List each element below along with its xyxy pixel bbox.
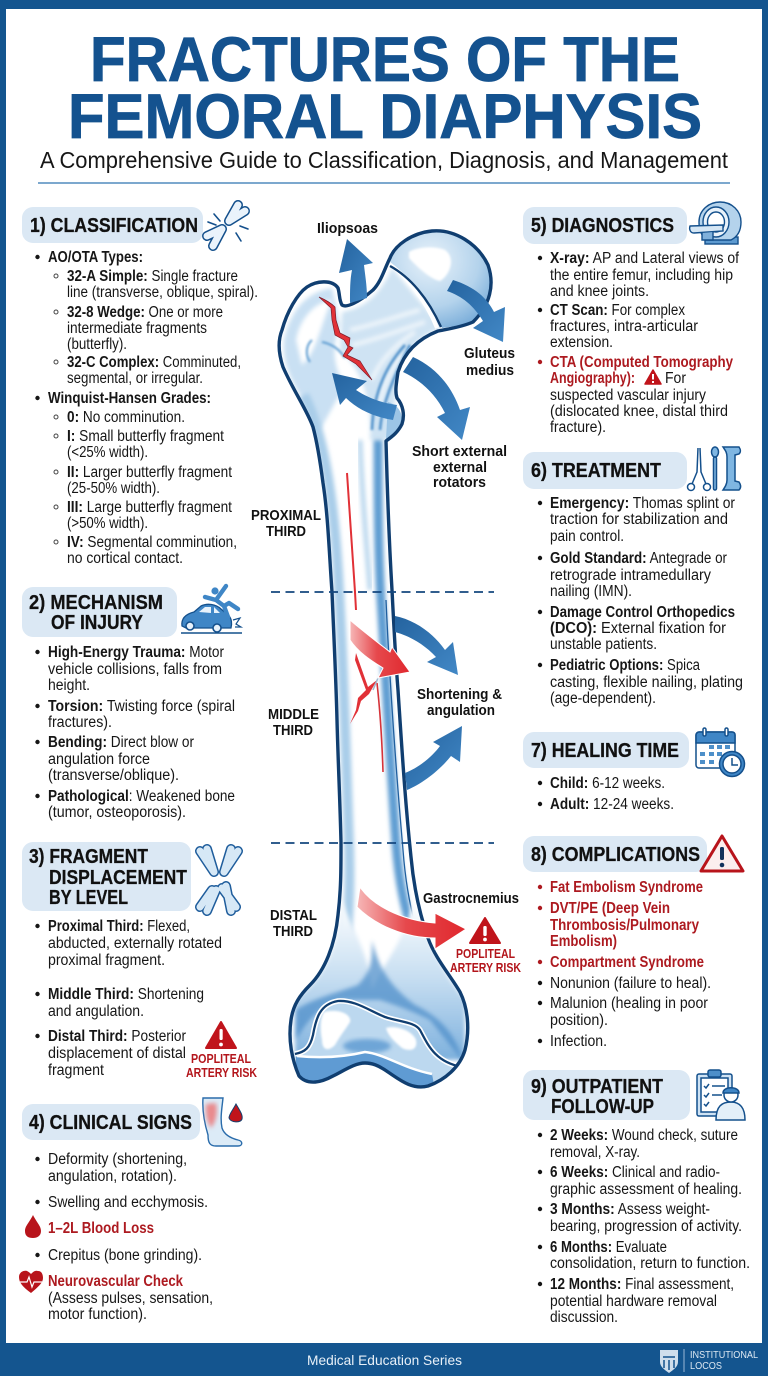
label: distal third: THIRD bbox=[273, 924, 313, 940]
treatment text: (age-dependent). bbox=[550, 690, 656, 707]
heading: clinical signs bbox=[22, 1104, 200, 1140]
title: FEMORAL DIAPHYSIS bbox=[68, 82, 702, 152]
panel: treatment bbox=[523, 447, 743, 707]
institutional logos text: INSTITUTIONAL bbox=[690, 1350, 758, 1361]
clinical signs text: Swelling and ecchymosis. bbox=[48, 1194, 208, 1211]
fragment displacement text: fragment bbox=[48, 1062, 105, 1079]
treatment text: casting, flexible nailing, plating bbox=[550, 674, 743, 691]
treatment text: Gold Standard: Antegrade or bbox=[550, 550, 727, 567]
treatment text: unstable patients. bbox=[550, 636, 657, 653]
heading: fragment displacement by level: DISPLACEMENT bbox=[49, 866, 187, 889]
diagnostics text bbox=[538, 250, 740, 436]
treatment text: Damage Control Orthopedics bbox=[550, 604, 735, 621]
heading: clinical signs: 4) CLINICAL SIGNS bbox=[29, 1111, 192, 1134]
follow-up text: removal, X-ray. bbox=[550, 1144, 640, 1161]
heading: mechanism of injury bbox=[22, 587, 177, 637]
heading: classification bbox=[22, 207, 203, 243]
label: middle third: THIRD bbox=[273, 723, 313, 739]
follow-up text: 6 Weeks: Clinical and radio- bbox=[550, 1164, 720, 1181]
icon: heart with pulse bbox=[19, 1271, 43, 1293]
icon: MRI scanner bbox=[690, 202, 741, 244]
classification text: (25-50% width). bbox=[67, 480, 160, 497]
footer bbox=[307, 1349, 758, 1373]
heading: outpatient follow-up: 9) OUTPATIENT bbox=[531, 1075, 663, 1098]
callout: popliteal artery risk at femur: POPLITEAL bbox=[456, 946, 515, 961]
complications text bbox=[538, 879, 711, 1050]
fragment displacement text: displacement of distal bbox=[48, 1045, 186, 1062]
callout: popliteal artery risk: POPLITEAL bbox=[191, 1051, 251, 1066]
diagnostics text: suspected vascular injury bbox=[550, 387, 706, 404]
clinical signs text: angulation, rotation). bbox=[48, 1168, 177, 1185]
heading: healing time: 7) HEALING TIME bbox=[531, 739, 679, 762]
fragment displacement text: Proximal Third: Flexed, bbox=[48, 918, 190, 935]
diagnostics text: For bbox=[665, 370, 686, 387]
follow-up text bbox=[538, 1127, 750, 1326]
diagnostics text: fractures, intra-articular bbox=[550, 318, 698, 335]
fragment displacement text: Middle Third: Shortening bbox=[48, 986, 204, 1003]
condyle surface bbox=[290, 1001, 465, 1095]
classification text: 32-A Simple: Single fracture bbox=[67, 268, 238, 285]
label: short external rotators bbox=[412, 444, 507, 491]
healing time text bbox=[538, 775, 674, 813]
heading: fragment displacement by level: 3) FRAGMENT bbox=[29, 845, 148, 868]
heading: complications: 8) COMPLICATIONS bbox=[531, 843, 700, 866]
arrow: red middle third bbox=[350, 620, 410, 678]
complications text: Malunion (healing in poor bbox=[550, 995, 708, 1012]
icon: inline warning bbox=[645, 370, 661, 384]
heading: fragment displacement by level: BY LEVEL bbox=[49, 886, 128, 909]
fragment displacement text bbox=[35, 918, 222, 1079]
title bbox=[68, 25, 702, 152]
panel: outpatient follow-up bbox=[523, 1070, 750, 1326]
complications text: Infection. bbox=[550, 1033, 607, 1050]
trochanter shading bbox=[284, 288, 345, 430]
follow-up text: 2 Weeks: Wound check, suture bbox=[550, 1127, 738, 1144]
classification text: IV: Segmental comminution, bbox=[67, 534, 237, 551]
icon: clipboard and doctor bbox=[697, 1070, 745, 1120]
diagnostics text: the entire femur, including hip bbox=[550, 267, 733, 284]
classification text: III: Large butterfly fragment bbox=[67, 499, 233, 516]
panel: diagnostics bbox=[523, 202, 741, 436]
callout: popliteal artery risk: ARTERY RISK bbox=[186, 1065, 257, 1080]
shaft right strips bbox=[378, 440, 432, 975]
complications text: Compartment Syndrome bbox=[550, 954, 704, 971]
label: middle third: MIDDLE bbox=[268, 707, 319, 723]
arrow: proximal fragment rotation bbox=[332, 373, 397, 420]
institutional logos text: LOCOS bbox=[690, 1361, 722, 1372]
icon: blood drop bbox=[25, 1215, 41, 1238]
complications text: Thrombosis/Pulmonary bbox=[550, 917, 699, 934]
arrow: gluteus medius bbox=[447, 280, 505, 342]
panel: healing time bbox=[523, 728, 744, 813]
mechanism text: fractures). bbox=[48, 714, 112, 731]
callout: popliteal artery risk bbox=[186, 1022, 257, 1080]
follow-up text: graphic assessment of healing. bbox=[550, 1181, 742, 1198]
callout: popliteal artery risk at femur: ARTERY RISK bbox=[450, 960, 521, 975]
heading: healing time bbox=[523, 732, 689, 768]
heading: diagnostics: 5) DIAGNOSTICS bbox=[531, 214, 674, 237]
fragment displacement text: abducted, externally rotated bbox=[48, 935, 222, 952]
clinical signs text: Deformity (shortening, bbox=[48, 1151, 187, 1168]
treatment text: Emergency: Thomas splint or bbox=[550, 495, 735, 512]
panel: complications bbox=[523, 836, 743, 1050]
icon: broken bone bbox=[207, 205, 248, 246]
mechanism text: Bending: Direct blow or bbox=[48, 734, 194, 751]
follow-up text: discussion. bbox=[550, 1309, 618, 1326]
fragment displacement text: and angulation. bbox=[48, 1003, 144, 1020]
diagnostics text: extension. bbox=[550, 334, 613, 351]
panel: clinical signs bbox=[19, 1098, 242, 1323]
treatment text: retrograde intramedullary bbox=[550, 567, 711, 584]
lesser trochanter bbox=[386, 402, 402, 439]
mechanism text: (tumor, osteoporosis). bbox=[48, 804, 186, 821]
callout: popliteal artery risk at femur bbox=[450, 918, 521, 975]
fragment displacement text: proximal fragment. bbox=[48, 952, 165, 969]
follow-up text: 12 Months: Final assessment, bbox=[550, 1276, 734, 1293]
heading: fragment displacement by level bbox=[22, 842, 191, 911]
heading: mechanism of injury: OF INJURY bbox=[51, 611, 143, 634]
distal metaphysis bbox=[295, 900, 465, 1060]
mechanism text: (transverse/oblique). bbox=[48, 767, 179, 784]
healing time text: Child: 6-12 weeks. bbox=[550, 775, 665, 792]
arrow: iliopsoas bbox=[339, 239, 373, 303]
treatment text: pain control. bbox=[550, 528, 624, 545]
follow-up text: bearing, progression of activity. bbox=[550, 1218, 742, 1235]
label: iliopsoas: Iliopsoas bbox=[317, 221, 378, 237]
mechanism text bbox=[35, 644, 235, 821]
arrow: short external rotators bbox=[403, 357, 470, 440]
label: middle third bbox=[268, 707, 319, 739]
neck shading bbox=[340, 268, 442, 440]
classification text bbox=[35, 249, 258, 567]
follow-up text: consolidation, return to function. bbox=[550, 1255, 750, 1272]
complications text: Nonunion (failure to heal). bbox=[550, 975, 711, 992]
label: gluteus medius: medius bbox=[466, 363, 514, 379]
heading: diagnostics bbox=[523, 207, 687, 244]
classification text: (>50% width). bbox=[67, 515, 148, 532]
classification text: 32-C Complex: Comminuted, bbox=[67, 354, 241, 371]
classification text: Winquist-Hansen Grades: bbox=[48, 390, 211, 407]
arrow: angulation lower bbox=[405, 726, 462, 790]
title: FRACTURES OF THE bbox=[90, 25, 680, 95]
heading: treatment bbox=[523, 452, 687, 489]
panel: classification bbox=[22, 205, 258, 567]
mechanism text: Pathological: Weakened bone bbox=[48, 788, 235, 805]
classification text: I: Small butterfly fragment bbox=[67, 428, 225, 445]
heading: mechanism of injury: 2) MECHANISM bbox=[29, 591, 163, 614]
clinical signs text: motor function). bbox=[48, 1306, 147, 1323]
icon: surgical instruments bbox=[688, 447, 740, 490]
follow-up text: 6 Months: Evaluate bbox=[550, 1239, 667, 1256]
arrow: red distal third bbox=[357, 887, 466, 949]
heading: outpatient follow-up bbox=[523, 1070, 690, 1120]
mechanism text: vehicle collisions, falls from bbox=[48, 661, 222, 678]
treatment text: Pediatric Options: Spica bbox=[550, 657, 700, 674]
clinical signs text: Neurovascular Check bbox=[48, 1273, 183, 1290]
classification text: no cortical contact. bbox=[67, 550, 183, 567]
label: proximal third: PROXIMAL bbox=[251, 508, 321, 524]
label: gastrocnemius: Gastrocnemius bbox=[423, 891, 519, 907]
diagnostics text: Angiography): bbox=[550, 370, 635, 387]
label: short external rotators: rotators bbox=[433, 475, 486, 491]
complications text: position). bbox=[550, 1012, 608, 1029]
follow-up text: potential hardware removal bbox=[550, 1293, 717, 1310]
classification text: AO/OTA Types: bbox=[48, 249, 143, 266]
healing time text: Adult: 12-24 weeks. bbox=[550, 796, 674, 813]
panel: fragment displacement bbox=[22, 842, 257, 1080]
classification text: 0: No comminution. bbox=[67, 409, 185, 426]
subtitle: A Comprehensive Guide to Classification, Diagnosis, and Management bbox=[40, 147, 728, 173]
icon: calendar and clock bbox=[696, 728, 744, 776]
icon: car collision and falling person bbox=[181, 586, 242, 633]
bone illustration bbox=[262, 222, 512, 1098]
heading: complications bbox=[523, 836, 707, 872]
treatment text: (DCO): External fixation for bbox=[550, 620, 726, 637]
treatment text: nailing (IMN). bbox=[550, 583, 632, 600]
panel: mechanism of injury bbox=[22, 586, 242, 821]
icon: crossed bones bbox=[200, 849, 238, 911]
treatment text: traction for stabilization and bbox=[550, 511, 728, 528]
diagnostics text: fracture). bbox=[550, 419, 606, 436]
classification text: 32-8 Wedge: One or more bbox=[67, 304, 223, 321]
label: gluteus medius bbox=[464, 346, 515, 379]
diagnostics text: (dislocated knee, distal third bbox=[550, 403, 728, 420]
complications text: DVT/PE (Deep Vein bbox=[550, 900, 670, 917]
mechanism text: angulation force bbox=[48, 751, 150, 768]
fragment displacement text: Distal Third: Posterior bbox=[48, 1028, 186, 1045]
classification text: (<25% width). bbox=[67, 444, 148, 461]
complications text: Embolism) bbox=[550, 933, 617, 950]
diagnostics text: X-ray: AP and Lateral views of bbox=[550, 250, 740, 267]
institutional logos text bbox=[690, 1350, 758, 1372]
mechanism text: High-Energy Trauma: Motor bbox=[48, 644, 224, 661]
diagnostics text: CT Scan: For complex bbox=[550, 302, 685, 319]
classification text: II: Larger butterfly fragment bbox=[67, 464, 233, 481]
heading: outpatient follow-up: FOLLOW-UP bbox=[551, 1095, 654, 1118]
clinical signs text: 1–2L Blood Loss bbox=[48, 1220, 154, 1237]
label: gluteus medius: Gluteus bbox=[464, 346, 515, 362]
label: shortening and angulation bbox=[417, 687, 502, 719]
mechanism text: height. bbox=[48, 677, 90, 694]
mechanism text: Torsion: Twisting force (spiral bbox=[48, 698, 235, 715]
label: shortening and angulation: angulation bbox=[427, 703, 495, 719]
label: shortening and angulation: Shortening & bbox=[417, 687, 502, 703]
follow-up text: 3 Months: Assess weight- bbox=[550, 1201, 710, 1218]
classification text: segmental, or irregular. bbox=[67, 370, 203, 387]
label: short external rotators: external bbox=[433, 460, 487, 476]
arrow: shortening upper bbox=[395, 616, 458, 675]
femur diagram bbox=[251, 221, 521, 1098]
icon: warning triangle bbox=[701, 836, 743, 871]
footer series text: Medical Education Series bbox=[307, 1352, 462, 1368]
clinical signs text bbox=[35, 1151, 213, 1323]
clinical signs text: (Assess pulses, sensation, bbox=[48, 1290, 213, 1307]
fracture lines bbox=[319, 297, 383, 772]
heading: classification: 1) CLASSIFICATION bbox=[30, 214, 198, 237]
shaft left strip bbox=[304, 395, 349, 960]
classification text: line (transverse, oblique, spiral). bbox=[67, 284, 258, 301]
label: distal third bbox=[270, 908, 317, 940]
label: distal third: DISTAL bbox=[270, 908, 317, 924]
icon: swollen leg and blood drop bbox=[203, 1098, 242, 1146]
classification text: intermediate fragments bbox=[67, 320, 207, 337]
heading: treatment: 6) TREATMENT bbox=[531, 459, 661, 482]
femoral head bbox=[390, 231, 491, 328]
classification text: (butterfly). bbox=[67, 336, 127, 353]
label: short external rotators: Short external bbox=[412, 444, 507, 460]
complications text: Fat Embolism Syndrome bbox=[550, 879, 703, 896]
label: proximal third: THIRD bbox=[266, 524, 306, 540]
treatment text bbox=[538, 495, 743, 707]
clinical signs text: Crepitus (bone grinding). bbox=[48, 1247, 202, 1264]
diagnostics text: CTA (Computed Tomography bbox=[550, 354, 733, 371]
label: proximal third bbox=[251, 508, 321, 540]
icon: institutional shield bbox=[660, 1350, 678, 1373]
diagnostics text: and knee joints. bbox=[550, 283, 649, 300]
